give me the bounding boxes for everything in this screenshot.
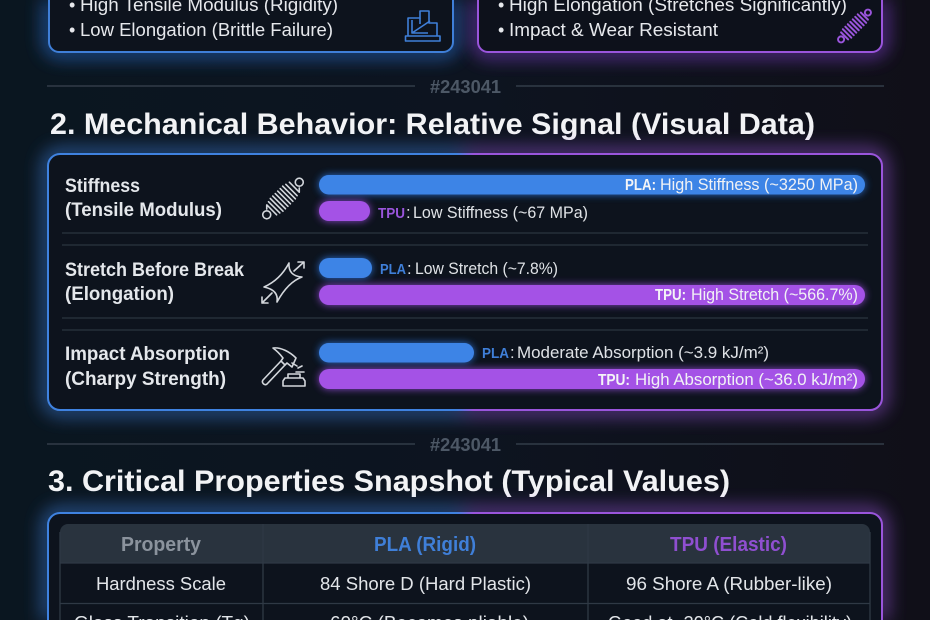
bar: PLA stretch: : bbox=[407, 260, 412, 278]
bar: TPU stiffness: Low Stiffness (~67 MPa) bbox=[413, 204, 588, 222]
TPU bullet list: Impact & Wear Resistant bbox=[509, 20, 718, 40]
bar: TPU stretch: TPU: bbox=[655, 287, 686, 304]
bar: TPU impact: TPU: bbox=[598, 372, 630, 389]
stretch label: Stretch Before Break bbox=[65, 260, 244, 281]
panel: mechanical behavior bbox=[48, 154, 882, 410]
heading: section 3: 3. Critical Properties Snapshot (Typical Values) bbox=[48, 465, 730, 498]
bar: TPU stiffness: : bbox=[406, 204, 411, 222]
bar: PLA impact: : bbox=[510, 344, 515, 362]
bar: TPU stretch: High Stretch (~566.7%) bbox=[691, 286, 858, 304]
stiffness label bbox=[65, 176, 222, 221]
row: hardness scale: 96 Shore A (Rubber-like) bbox=[626, 574, 832, 594]
panel: properties table bbox=[48, 513, 882, 620]
table grid bbox=[60, 524, 870, 620]
bar: PLA stretch: PLA bbox=[380, 261, 406, 278]
row: hardness scale bbox=[96, 574, 832, 594]
bar: TPU stiffness bbox=[319, 201, 588, 222]
impact label: (Charpy Strength) bbox=[65, 369, 226, 390]
icon: purple spring bbox=[835, 6, 874, 46]
impact label bbox=[65, 344, 230, 390]
bar: PLA stretch bbox=[319, 258, 558, 278]
bar: TPU stretch bbox=[319, 285, 865, 305]
TPU bullet list: • bbox=[498, 20, 504, 40]
divider with tag: #243041 bbox=[430, 435, 501, 455]
table header bbox=[60, 524, 870, 563]
icon: rigid block bbox=[406, 11, 440, 41]
bar: PLA stiffness: High Stiffness (~3250 MPa) bbox=[660, 176, 858, 194]
icon: spring bbox=[258, 173, 308, 224]
bar: PLA stretch: Low Stretch (~7.8%) bbox=[415, 260, 558, 278]
bar: PLA impact: PLA bbox=[482, 345, 509, 362]
bar: PLA stiffness: PLA: bbox=[625, 177, 656, 194]
icon: hammer and anvil bbox=[262, 348, 305, 386]
PLA bullet list: Low Elongation (Brittle Failure) bbox=[80, 20, 333, 40]
table header: TPU (Elastic) bbox=[670, 534, 787, 556]
PLA bullet list bbox=[69, 0, 338, 40]
row: stiffness bbox=[65, 173, 865, 224]
icon: stretched star with arrows bbox=[262, 262, 304, 303]
stiffness label: Stiffness bbox=[65, 176, 140, 197]
heading: section 2: 2. Mechanical Behavior: Relative Signal (Visual Data) bbox=[50, 108, 815, 141]
stiffness label: (Tensile Modulus) bbox=[65, 200, 222, 221]
bar: PLA impact bbox=[319, 343, 769, 362]
row: glass transition bbox=[74, 613, 852, 620]
bar: PLA stiffness bbox=[319, 175, 865, 194]
row: impact bbox=[65, 343, 865, 390]
divider with tag: #243041 bbox=[430, 77, 501, 97]
row: hardness scale: 84 Shore D (Hard Plastic) bbox=[320, 574, 531, 594]
bar: PLA impact: Moderate Absorption (~3.9 kJ/m²) bbox=[517, 344, 769, 362]
stretch label bbox=[65, 260, 244, 305]
bar: TPU impact bbox=[319, 369, 865, 389]
PLA bullet list: • bbox=[69, 20, 75, 40]
panel: PLA summary bbox=[49, 0, 453, 52]
bar: TPU stiffness: TPU bbox=[378, 205, 405, 222]
stretch label: (Elongation) bbox=[65, 284, 174, 305]
bar: TPU impact: High Absorption (~36.0 kJ/m²) bbox=[635, 371, 858, 389]
table header: PLA (Rigid) bbox=[374, 534, 476, 556]
row: stretch bbox=[65, 258, 865, 305]
panel: TPU summary bbox=[478, 0, 882, 52]
TPU bullet list bbox=[498, 0, 847, 40]
row: hardness scale: Hardness Scale bbox=[96, 574, 226, 594]
impact label: Impact Absorption bbox=[65, 344, 230, 365]
table header: Property bbox=[121, 534, 202, 556]
